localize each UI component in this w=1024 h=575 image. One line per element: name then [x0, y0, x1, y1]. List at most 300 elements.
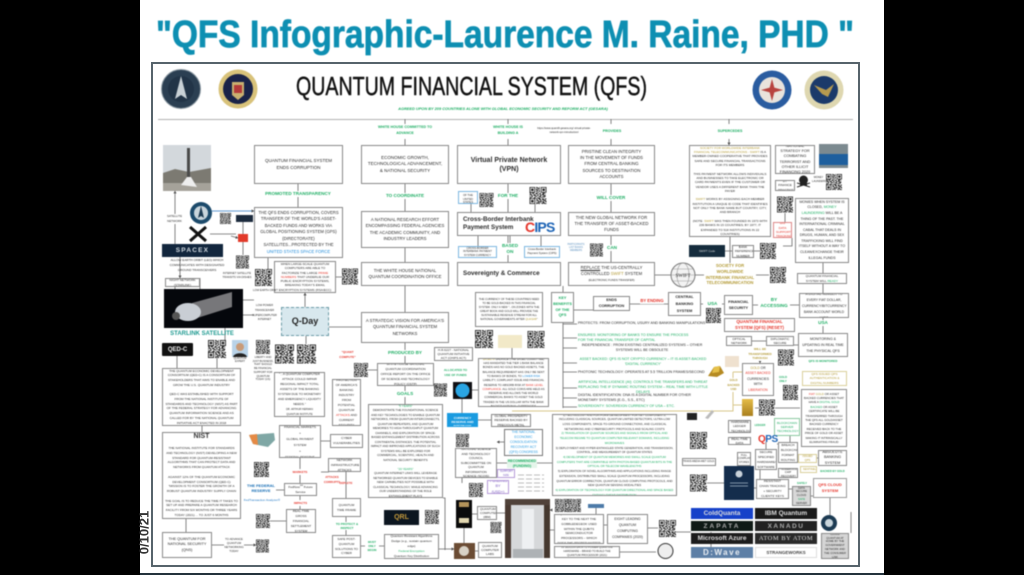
- label: goals: GOALS: [397, 391, 413, 396]
- box: quantum computer quote: "...A QUANTUM COMPUTER ATTACK COULD IMPAIR REGIONAL IMPACT TOTAL ASSETS OF THE BANKING SYSTEM DUE TO MONETARY AND EMERGENCY LIQUIDITY NEEDS.": [278, 372, 321, 406]
- icon: device silver: [705, 410, 714, 420]
- seal: presidential: [218, 68, 258, 110]
- label: by accessing: BY ACCESSING: [760, 297, 788, 308]
- box: QFS issued: [802, 371, 847, 386]
- photo: strategy report cover: [818, 143, 849, 169]
- box: large technology list: 2) TRANSLATION OF QUANTUM SOURCES AND SIGNALS FROM OPTICAL AND TELECOM REGIME TO QUANTUM COMPUTER RELEVANT DOMAINS, INCLUDING MICROWAVES: [560, 431, 669, 445]
- QR code: [759, 242, 777, 260]
- QR code: [568, 499, 581, 512]
- box: quantum initiative act: H.R.6227 - NATIONAL QUANTUM INITIATIVE ACT (CHIPS ACT): [438, 348, 469, 360]
- box: blockchain: BLOCKCHAIN SERVER TECHNOLOGY: [777, 421, 799, 433]
- photo: Starlink satellite: [163, 288, 244, 329]
- label: url note: https://www.quantifi-gesara.org/ virtual-private-network-vpn-introduction/: [537, 127, 591, 134]
- box: eight leading: EIGHT LEADING QUANTUM COMPUTING COMPANIES (2020): [612, 517, 643, 539]
- label: USA lower: USA: [818, 320, 828, 325]
- logo: Atom by Atom: ATOM BY ATOM: [759, 535, 813, 542]
- logo: QRL: QRL: [394, 514, 409, 521]
- label: for the: FOR THE: [498, 193, 518, 198]
- QR code: [690, 432, 707, 449]
- box: goals: QUANTUM INTERNET LINKS WILL LEVERAGE NETWORKED QUANTUM DEVICES TO ENABLE NEW CAPABILITIES NOT POSSIBLE WITH CLASSICAL TECHNOLOGY, WHILE ADVANCING OUR UNDERSTANDING OF THE ROLE ENTANGLEMENT PLAYS: [373, 471, 438, 498]
- logo: dark swift badge: [689, 245, 725, 257]
- label: provides: [592, 128, 632, 134]
- box: QED-C: [162, 343, 193, 356]
- box: QED-C description: QED-C WAS ESTABLISHED WITH SUPPORT FROM THE NATIONAL INSTITUTE OF STANDARDS AND TECHNOLOGY (NIST) AS PART OF THE FEDERAL STRATEGY FOR ADVANCING QUANTUM INFORMATION SCIENCE AND AS CALLED FOR BY THE NATIONAL QUANTUM INITIATIVE ACT ENACTED IN 2018: [165, 392, 238, 425]
- box: goals: [368, 404, 443, 498]
- box: pristine clean integrity: PRISTINE CLEAN INTEGRITY: [582, 149, 641, 154]
- label: attack: ATTACKS CORRUPTS: [324, 475, 340, 484]
- box: pristine clean integrity: IN THE MOVEMENT OF FUNDS: [580, 155, 643, 160]
- list item: asset backed: ASSET BACKED: QFS IS NOT CRYPTO CURRENCY – IT IS ASSET-BACKED 'DIGITAL CURRENCY': [580, 357, 706, 366]
- label: impacts: IMPACTS: [294, 501, 307, 505]
- label: green funded: [365, 540, 379, 552]
- box: quantum resistant algorithms: [384, 534, 439, 559]
- label: will cover: [590, 195, 632, 201]
- box: night network: [165, 278, 200, 287]
- label: key benefits: [551, 292, 574, 323]
- white slide panel: [140, 0, 884, 575]
- label: building a: BUILDING A: [498, 130, 518, 134]
- label: blue mini list: PARTICIPANTS LIST BANKS MEMBERS: [567, 243, 584, 252]
- label: building a: WHITE HOUSE IS: [493, 125, 523, 129]
- box: gold currencies: GOLD OR ASSET-BACKED CURRENCIES WITH LIBERATION: [745, 366, 771, 392]
- box: Q-Day: [281, 307, 329, 336]
- box: central banking: [668, 292, 701, 316]
- box: cyber vulnerabilities: CYBER VULNERABILITIES: [333, 436, 360, 445]
- box: tan small: SENTINEL: [803, 468, 816, 471]
- box: diplomatic secure: [766, 336, 794, 346]
- label: allocated: ALLOCATED TO USE OF FUNDS: [444, 368, 467, 376]
- box: large technology list: 5) EXPLORATION OF NOVEL ALGORITHMS AND APPLICATIONS INCLUDING RANGE EXTENSION, DISTRIBUTED SMALL SCALE QUANTUM PROCESSORS, INCLUDING QUANTUM ERROR CORRECTION, QUANTUM CLOUD COMPUTING PROTOCOLS, AND NEW QUANTUM SENSING MODALITIES: [556, 469, 673, 487]
- box: blue ad text: THE NATIONAL ECONOMIC CONSOLIDATION RECOVERY ACT (QFS) CONGRESS: [509, 430, 538, 454]
- badge: small blue: [588, 504, 604, 508]
- box: SWIFT explanation: [689, 145, 771, 237]
- QR code: [256, 539, 269, 553]
- label: committed to advance: WHITE HOUSE COMMITTED TO ADVANCE: [378, 125, 432, 134]
- box: cross-border interbank: Payment System: [463, 224, 513, 231]
- box: new global network: THE NEW GLOBAL NETWORK FOR THE TRANSFER OF ASSET-BACKED FUNDS: [575, 215, 648, 232]
- box: VPN: (VPN): [499, 166, 519, 172]
- list item: independence: INDEPENDENCE : FROM EXISTING CENTRALIZED SYSTEMS – OTHER SYSTEMS WILL BE OBSOLETE: [582, 343, 702, 352]
- box: blue CIPS note right: [524, 246, 560, 258]
- box: when large-scale quantum: WHEN LARGE-SCALE QUANTUM COMPUTERS ARE ABLE TO FACTORIZE THE LARGE PRIME NUMBERS THAT UNDERLIE OUR PUBLIC ENCRYPTION SYSTEMS, BREAKING TODAY'S EMAIL ENCRYPTION SYSTEMS (RSA/ECC): [279, 262, 331, 292]
- label: will be transformed: WILL BE TRANSFORMED THROUGH: [748, 347, 772, 360]
- label: satellite network: SATELLITE NETWORK: [167, 214, 182, 223]
- box: sovereignty: Sovereignty & Commerce: [463, 270, 540, 277]
- box: NIST: THE NATIONAL INSTITUTE FOR STANDARDS AND TECHNOLOGY (NIST) DEVELOPING A NEW STANDARD FOR QUANTUM-RESISTANT ALGORITHMS THAT CAN PROTECT DATA AND NETWORKS FROM QUANTUM ATTACK: [166, 446, 237, 469]
- logo: Zapata: [691, 521, 753, 531]
- box: economic growth: TECHNOLOGICAL ADVANCEMENT,: [368, 161, 442, 166]
- list item: photonic: PHOTONIC TECHNOLOGY: OPERATES AT 5.5 TRILLION FRAMES/SECOND: [578, 370, 705, 374]
- book: navy report: [724, 466, 754, 500]
- label: supercedes: SUPERCEDES: [718, 129, 742, 133]
- box: quantum time: [332, 498, 361, 517]
- box: quantum for national security: [162, 532, 212, 558]
- box: replace SWIFT: [568, 262, 655, 286]
- icon: SWIFT globe: [670, 262, 696, 288]
- box: gray QFS note: CLOUD QUANTUM AT HOME BY THE GOVERNMENT NETWORK AND THE CONSUMER LINK: [824, 533, 846, 558]
- QR code: [296, 344, 317, 364]
- logo: federal reserve: THE FEDERAL RESERVE: [247, 483, 275, 493]
- box: financial security: [724, 295, 753, 315]
- box: qubits power: IN SILICON DATA TO POWER QUANTUM HARDWARE – BRAND TO BUILD THE QUANTUM PROCESSOR (2021): [561, 546, 613, 557]
- label: monetary: [290, 469, 310, 475]
- box: quantum resistant algorithms: Federal Encryption: [399, 549, 424, 553]
- QR code: [255, 339, 271, 355]
- QR code: [219, 212, 232, 225]
- QR code: [256, 514, 270, 528]
- label: society for worldwide: SOCIETY FOR WORLDWIDE INTERBANK FINANCIAL TELECOMMUNICATION: [706, 263, 754, 285]
- text: satellite side notes two: LOW POWER TRANSCEIVER SUPERCOMPUTER INTERNET: [252, 304, 277, 321]
- box: VPN: [457, 145, 561, 184]
- box: SWIFT explanation: THIS PAYMENT NETWORK ALLOWS INDIVIDUALS AND BUSINESSES TO TAKE ELECTRONIC OR CARD PAYMENTS EVEN IF THE CUSTOMER OR VENDOR USES A DIFFERENT BANK THAN THE PAYER: [694, 172, 766, 193]
- box: quantum financial system red: QUANTUM FINANCIAL: [736, 319, 783, 324]
- box: QFS ends corruption: [254, 145, 343, 184]
- diagram frame: [151, 62, 860, 567]
- text: satellite side notes: LOW EARTH ORBIT: [253, 289, 278, 292]
- box: tan QPS: ISSUED QPS: [802, 455, 812, 462]
- box: ends corruption: ENDS CORRUPTION: [599, 298, 624, 308]
- box: QFS issued: QFS ISSUED QPS AUTHENTICATION & DIGITAL NUMBERS: [810, 372, 839, 385]
- box: quantum computer quote: [274, 372, 325, 417]
- QR code: [782, 384, 799, 401]
- box: cross-border interbank: [457, 212, 561, 236]
- box: large technology list: 4) DEVELOPMENT OF QUANTUM MEMORIES AND SMALL SCALE QUANTUM COMPUTERS THAT ARE COMPATIBLE WITH PHOTON-BASED QUANTUM BITS IN THE OPTICAL OR TELECOM WAVELENGTHS: [557, 455, 672, 468]
- seal: eagle: [804, 70, 844, 110]
- photo: quantum computer lab: [505, 499, 550, 558]
- box: eight leading: [607, 514, 648, 544]
- map: United States: [248, 432, 276, 448]
- logo: CIPS small: QPS: [758, 434, 778, 445]
- box: goals: "20 YEARS": [398, 467, 413, 471]
- label: to coordinate: TO COORDINATE: [386, 193, 424, 198]
- list item: artificial intelligence: ARTIFICIAL INTELLIGENCE (AI): CONTROLS THE TRANSFERS AND THREAT REPLACING THE IF DYNAMIC ROUTING SYSTEM – REAL TIME WITH LITTLE DELAYS: [578, 380, 708, 394]
- logo: D-Wave: D:Wave: [703, 548, 741, 557]
- logo: tan central bank card: [498, 335, 522, 348]
- QR code: [207, 339, 227, 359]
- logo: CIPS: CIPS: [525, 219, 554, 235]
- box: QFS will be ready: [797, 273, 847, 284]
- label: goals: [393, 391, 417, 397]
- box: monitoring: MONITORING & UPDATING IN REAL TIME THE PHYSICAL QFS: [802, 337, 844, 353]
- logo: D-Wave: [691, 547, 753, 558]
- QR code: [769, 266, 787, 284]
- label: hidden green arrow tag: LEDGER: [755, 424, 765, 427]
- box: economic growth: [361, 145, 449, 184]
- box: blockchain: [774, 418, 800, 436]
- label: hidden green arrow tag: [753, 423, 767, 429]
- box: sovereignty: [457, 262, 561, 286]
- box: White House coordination office: [361, 262, 449, 286]
- label: can: CAN: [607, 245, 617, 250]
- box: quantum time: QUANTUM TIME FRAME: [337, 503, 356, 512]
- box: SWIFT explanation: SWIFT WORKS BY ASSIGNING EACH MEMBER INSTITUTION A UNIQUE ID CODE THAT IDENTIFIES NOT ONLY THE BANK NAME BUT COUNTRY, CITY, AND BRANCH: [692, 197, 768, 214]
- logo: dark swift badge: SWIFT Code: [699, 249, 715, 253]
- box: quantum financial system red: [724, 318, 795, 332]
- logo: fed transaction analyzer: FedTransaction Analyzer®: [244, 498, 280, 502]
- rotated date stamp: 0/10/21: [136, 511, 152, 554]
- box: national research effort: A NATIONAL RESEARCH EFFORT ENCOMPASSING FEDERAL AGENCIES THE ACADEMIC COMMUNITY, AND INDUSTRY LEADERS: [366, 217, 444, 241]
- box: RTGS: [286, 509, 316, 533]
- box: financial security: FINANCIAL SECURITY: [728, 300, 749, 310]
- label: recommends: RECOMMENDED (FUNDING): [508, 459, 536, 468]
- QR code: [425, 510, 439, 524]
- QR code: [235, 254, 250, 270]
- QR code: [528, 186, 548, 205]
- list item: ensures: ENSURES: MONITORING OF BANKS TO ENSURE THE PROCESS FOR THE FINANCIAL TRANSFER OF CAPITAL: [578, 333, 688, 342]
- seal: intelligence: [752, 70, 792, 110]
- QR code: [555, 499, 568, 512]
- QR code: [758, 398, 776, 416]
- label: green QFS only: [776, 375, 790, 383]
- QR code: [589, 242, 604, 258]
- logo: tan eagle: [725, 356, 739, 367]
- box: blue ad text: [504, 429, 543, 456]
- box: pristine clean integrity: FROM CENTRAL BANKING: [584, 161, 639, 166]
- QR code: [433, 382, 448, 398]
- box: VPN: Virtual Private Network: [471, 156, 547, 164]
- icon: round chip: [656, 543, 675, 559]
- box: quantum computer labs: [478, 542, 502, 558]
- box: strategic vision: A STRATEGIC VISION FOR AMERICA'S QUANTUM FINANCIAL SYSTEM NETWORKS: [366, 318, 444, 336]
- label: can: [605, 245, 619, 251]
- icon: SWIFT globe: SWIFT: [676, 274, 690, 279]
- QR code: [658, 520, 677, 537]
- label: asset backed tan: GOLD BACKED USD: [728, 378, 739, 391]
- box: gold currencies: [742, 363, 774, 396]
- box: QFS ends corruption: QUANTUM FINANCIAL SYSTEM: [265, 158, 332, 163]
- box: fiat currency text: FIAT GOLD OR ASSET BACKED CURRENCIES THAT HAVE A DIGITAL GOLD BACKED OR ASSET CERTIFICATE WILL BE TRANSFERRED THROUGH THE QFS ALL GOLD/ASSET BACKED CURRENCY RECEIVED BACK TO THE PRICE OF GOLD OR ASSET MAKING IT INTRINSICALLY ELIMINATING FRAUD: [804, 392, 844, 444]
- label: committed to advance: [370, 125, 440, 136]
- seal: cloud: [821, 515, 837, 531]
- QR code: [353, 362, 369, 378]
- label: USA lower: [815, 320, 831, 326]
- logo: Xanadu: [755, 521, 817, 531]
- box: money when system is closed: MONIES WHEN SYSTEM IS CLOSED, MONEY LAUNDERING WILL BE A THING OF THE PAST. THE INTERNATIONAL CRIMINAL CABAL THAT DEALS IN DRUGS, HUMAN, AND SEX TRAFFICKING WILL FIND ITSELF WITHOUT A WAY TO CLEAN/EXCHANGE THEIR ILLEGAL FUNDS: [799, 200, 845, 260]
- logo: Microsoft Azure: [691, 533, 753, 544]
- box: purple small tag: SUPPORT SIZE: [500, 470, 513, 476]
- box: financial markets: [279, 425, 321, 458]
- label: USA: USA: [708, 301, 717, 306]
- box: goals: DEMONSTRATE THE FOUNDATIONAL SCIENCE AND KEY TECHNOLOGIES TO ENABLE QUANTUM NETWORKS, FROM QUANTUM INTERCONNECTS, QUANTUM REPEATERS, AND QUANTUM MEMORIES TO HIGH-THROUGHPUT QUANTUM CHANNELS, AND EXPLORATION OF SPACE-BASED ENTANGLEMENT DISTRIBUTION ACROSS CONTINENTAL DISTANCES. THE POTENTIAL IMPACT AND IMPROVED APPLICATIONS OF SUCH SYSTEMS WILL BE EXPLORED FOR COMMERCIAL, SCIENTIFIC, HEALTH AND NATIONAL SECURITY BENEFITS: [371, 408, 440, 462]
- box: QED-C: QED-C: [168, 346, 187, 352]
- photo: cryostat: [456, 500, 472, 528]
- label: promoted transparency: [258, 191, 338, 197]
- QR code: [474, 329, 494, 349]
- box: blue CIPS note left: CROSS-BORDER INTERBANK PAYMENT SYSTEM CURRENCY: [463, 247, 492, 257]
- box: RTGS: REAL-TIME GROSS FINANCIAL SETTLEMENT SYSTEM: [291, 509, 311, 532]
- box: currency of these countries: THE CURRENCY OF THESE COUNTRIES NEED TO BE GOLD-BACKED IN THIS FINANCIAL SYSTEM. ONLY A NEW "...ON ZONES WITH THE GREAT BOOK AND GOLD WILL PROVIDE THE SUSTAINABLE REVENUE STREAM FOR ALL NATIONAL GOVERNMENTS AFTER QUASAR": [479, 298, 539, 320]
- box: fully compliant: [737, 452, 751, 466]
- box: qubits power: [554, 546, 620, 558]
- box: NIST: [162, 432, 241, 519]
- box: optical network: [726, 336, 752, 346]
- box: NIST: AGAINST 12% OF THE QUANTUM ECONOMIC DEVELOPMENT CONSORTIUM (QED-C) "MISSION IS TO FOSTER THE GROWTH OF A ROBUST QUANTUM INDUSTRY SUPPLY CHAIN: [167, 475, 236, 493]
- box: swift small note: BANK REFERENCE NUMBER: [735, 245, 754, 258]
- box: ends corruption: [593, 296, 630, 311]
- box: FedNow: [284, 483, 317, 496]
- logo: Xanadu: XANADU: [768, 522, 804, 530]
- label: produced by: PRODUCED BY: [388, 350, 422, 355]
- QR code: [777, 348, 795, 366]
- box: QFS ends corruption detail: THE QFS ENDS CORRUPTION, COVERS TRANSFER OF THE WORLD'S ASSET-BACKED FUNDS AND WORKS VIA GLOBAL POSITIONING SYSTEM (GPS) (DIRECTORATE) SATELLITES...PROTECTED BY THE UNITED STATES SPACE FORCE: [258, 210, 339, 254]
- box: SWIFT explanation: (NOTE: SWIFT WAS THEN FOUNDED IN 1973 WITH 239 BANKS IN 15 COUNTRIES; BY 1977, IT EXPANDED TO 518 INSTITUTIONS IN 22 COUNTRIES): [693, 219, 767, 236]
- box: central banking: CENTRAL BANKING SYSTEM: [675, 294, 694, 312]
- box: currency of these countries: [475, 292, 543, 327]
- logo: Strangeworks: [755, 547, 817, 558]
- box: cross-border interbank: Cross-Border Interbank: [463, 216, 534, 222]
- box: pristine clean integrity: [568, 145, 655, 184]
- label: green QFS only: GOLD ONLY: [779, 375, 787, 383]
- label: QFS monitored: QFS IS MONITORED: [809, 359, 837, 363]
- label: green guard: BACKED BY GOLD: [820, 470, 845, 473]
- box: tranches: [682, 458, 716, 466]
- logo: red small badge: [238, 234, 248, 242]
- box: new global network: [568, 212, 655, 236]
- QR code: [254, 268, 273, 287]
- logo: SpaceX: [162, 244, 223, 257]
- box: cyber vulnerabilities: [330, 434, 363, 448]
- photo: single gold bar: [742, 399, 753, 416]
- icon: blue globe: [453, 382, 472, 399]
- QR code: [490, 522, 502, 533]
- logo: Strangeworks: STRANGEWORKS: [766, 550, 806, 555]
- QR code: [456, 433, 469, 448]
- box: FedNow: FedNowSM Future Service: [288, 485, 313, 494]
- logo: Microsoft Azure: Microsoft Azure: [698, 535, 746, 542]
- logo: IBM Quantum: IBM Quantum: [765, 510, 807, 517]
- bottom dark strip: [140, 573, 884, 575]
- box: secure national: SECURE SPECIFIED HARDWARE/ SOFTWARE: [757, 450, 776, 468]
- logo: dark small badge: [236, 215, 253, 222]
- text: to advance quantum: TO ADVANCE QUANTUM NETWORKING TODAY: [224, 537, 244, 553]
- QR code: [825, 173, 843, 191]
- box: large technology list: 3) DEPLOYMENT AND HYPER-ENTANGLED STATE GENERATION, AND TRANSMISSION, CONTROL, AND MEASUREMENT OF QUANTUM STATES: [556, 446, 673, 454]
- box: tan small: [800, 466, 817, 473]
- box: pristine clean integrity: ACCOUNTS: [599, 174, 624, 179]
- box: blue CIPS note right: Cross-Border Interbank Payment System (CIPS): [527, 248, 557, 255]
- logo: SpaceX: SPACEX: [176, 247, 209, 254]
- seal: space force: [160, 68, 202, 110]
- box: diplomatic secure: DIPLOMATIC SECURE: [771, 337, 789, 345]
- seal: space force small: [189, 201, 213, 225]
- label: impacts: [291, 500, 310, 506]
- box: QED-C description: [162, 368, 241, 426]
- box: night network: NIGHT NETWORK (STARLINK): [169, 278, 196, 286]
- label: terrorist financing: MONEY LAUNDERING: [812, 176, 829, 183]
- box: quantum for national security: THE QUANTUM FOR NATIONAL SECURITY (QNS): [168, 537, 206, 552]
- box: quantum computer labs: QUANTUM COMPUTER LABS: [481, 544, 499, 556]
- box: blue CIPS note left: [458, 246, 497, 258]
- box: tan QPS: [798, 454, 817, 463]
- label: green funded: MUST ONLY BEGIN: [368, 540, 376, 552]
- box: strategic vision: [361, 312, 449, 343]
- box: QFS will be ready: QUANTUM FINANCIAL SYSTEM WILL READY: [806, 274, 838, 282]
- label: QFS monitored: [800, 358, 846, 364]
- table: quantum data: [517, 472, 545, 493]
- photo: person: [232, 340, 248, 358]
- photo: round component: [454, 543, 475, 559]
- label: based on: BASED ON: [502, 243, 518, 254]
- box: quantum financial system red: SYSTEM (QFS) (RESET): [735, 325, 784, 330]
- label: provides: PROVIDES: [603, 129, 621, 133]
- box: SWIFT explanation: SOCIETY FOR WORLDWIDE INTERBANK FINANCIAL TELECOMMUNICATIONS - SWIFT IS A MEMBER-OWNED COOPERATIVE THAT PROVIDES SAFE AND SECURE FINANCIAL TRANSACTIONS FOR ITS MEMBERS: [693, 146, 767, 167]
- logo: Atom by Atom: [755, 533, 817, 544]
- label: by ending: BY ENDING: [640, 298, 664, 303]
- label: building a: [483, 125, 533, 136]
- box: Q-Day: Q-Day: [292, 316, 318, 326]
- box: financial markets: +: [299, 448, 301, 452]
- label: starlink satellite: STARLINK SATELLITE: [170, 331, 234, 337]
- label: supercedes: [708, 128, 752, 134]
- box: NIST: NIST: [194, 433, 209, 440]
- box: QFS ends corruption: ENDS CORRUPTION: [276, 164, 320, 170]
- box: quantum computer quote: DR. ARTHUR HERMAN: [286, 408, 313, 411]
- box: QFS cloud: [813, 478, 847, 498]
- box: economic growth: & NATIONAL SECURITY: [380, 168, 430, 173]
- label: will cover: WILL COVER: [597, 195, 625, 200]
- QR code: [705, 307, 722, 324]
- box: replace SWIFT: REPLACE THE US-CENTRALLY CONTROLLED SWIFT SYSTEM: [581, 265, 642, 276]
- label: quantum computing red: "QUANT COMPUTE": [339, 350, 356, 358]
- box: monitoring: [798, 333, 848, 357]
- icon: skull: [796, 174, 811, 188]
- box: quantum computer quote: QUANTUM INSTITUTE: [286, 413, 313, 416]
- QR code: [776, 196, 794, 214]
- box: White House coordination office: THE WHITE HOUSE NATIONAL QUANTUM COORDINATION OFFICE: [369, 268, 441, 279]
- label: key benefits: KEY BENEFITS OF THE QFS: [553, 296, 572, 317]
- list item: sovereignty: SOVEREIGNTY: SOVEREIGN CURRENCY OF USA – ETC.: [578, 404, 675, 408]
- box: large technology list: [552, 414, 677, 496]
- box: financial markets: GLOBAL PAYMENT SYSTEM: [286, 436, 314, 446]
- QR code: [469, 483, 483, 497]
- box: global prosperity: GLOBAL PROSPERITY RESERVE BACKED BY PRECIOUS METAL: [494, 414, 528, 427]
- label: to coordinate: [375, 193, 435, 199]
- QR code: [254, 462, 269, 477]
- box: financial markets: +: [299, 430, 301, 434]
- box: purple small tag: [497, 469, 515, 478]
- label: monetary: MARKETS: [293, 470, 307, 474]
- box: QED-C description: THE QUANTUM ECONOMIC DEVELOPMENT CONSORTIUM (QED-C) IS A CONSORTIUM OF STAKEHOLDERS THAT AIMS TO ENABLE AND GROW THE U.S. QUANTUM INDUSTRY: [168, 369, 235, 387]
- QR code: [274, 344, 295, 364]
- photo: gold bars: [708, 365, 724, 378]
- logo: ColdQuanta: ColdQuanta: [704, 510, 740, 517]
- header: small green subtitle: AGREED UPON BY 209 COUNTRIES ALONE WITH GLOBAL ECONOMIC SECURITY AND REFORM ACT (GESARA): [398, 106, 608, 111]
- label: promoted transparency: PROMOTED TRANSPARENCY: [265, 191, 331, 196]
- QR code: [478, 192, 494, 208]
- box: gray security: [792, 486, 811, 506]
- label: green link: SAFELY: [797, 482, 807, 485]
- QR code: [526, 330, 546, 349]
- label: quantum computing red: [335, 350, 360, 359]
- box: absolute banking: ABSOLUTE BANKING SYSTEM: [822, 450, 843, 465]
- list: key benefits of the QFS: PROTECTS: FROM CORRUPTION, USURY AND BANKING MANIPULATIONS: [578, 321, 705, 325]
- list item: digital identification: DIGITAL IDENTIFICATION: DNA IS A DIGITAL NUMBER FOR OTHER MONETARY SYSTEMS (E.G., S.S., ETC): [578, 393, 691, 402]
- box: NIST: THE GOAL IS TO REDUCE THE TIME IT TAKES TO SET UP AND PREPARE A QUANTUM RESEARCH FACILITY FROM SIX MONTHS OR THREE YEARS TODAY (2021) ... TO JUST 6 MONTHS: [165, 499, 238, 517]
- box: absolute banking: [818, 450, 847, 466]
- box: pristine clean integrity: SOURCES TO DESTINATION: [582, 168, 641, 173]
- label: to protect: TO PROTECT & INSPECT: [336, 522, 358, 530]
- QR code: [690, 474, 707, 492]
- box: optical network: OPTICAL NETWORK: [731, 337, 747, 345]
- logo: Zapata: ZAPATA: [704, 522, 740, 530]
- logo: QRL: [384, 510, 419, 525]
- logo: ColdQuanta: [691, 508, 753, 519]
- logo: X: [188, 226, 208, 243]
- box: QFS cloud: QFS CLOUD SYSTEM: [818, 482, 842, 493]
- logo: IBM Quantum: [755, 508, 817, 519]
- label: for the: [494, 193, 522, 199]
- text: low earth orbit: ALLOW EARTH ORBIT (LEO) WHICH COMMUNICATES WITH DESIGNATED GROUND TRANSCEIVERS: [170, 258, 224, 272]
